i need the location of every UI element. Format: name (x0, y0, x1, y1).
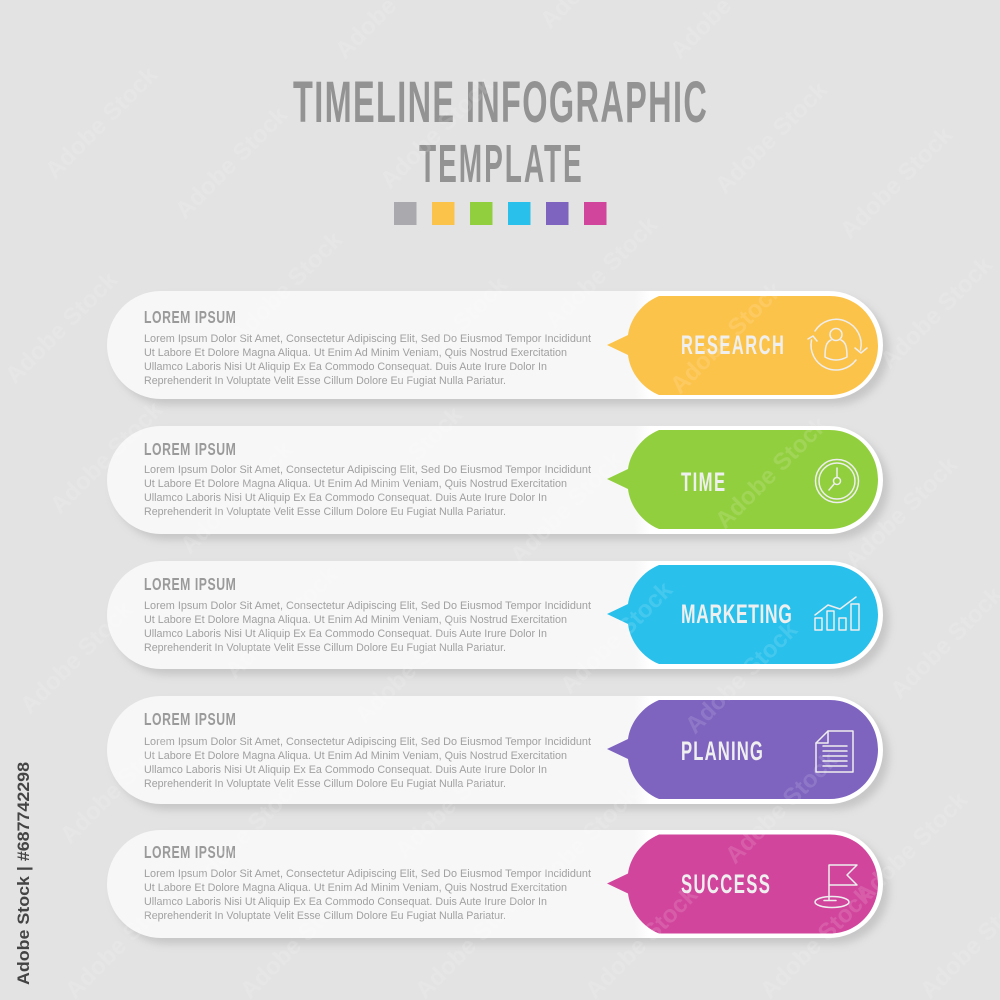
time text block: Ut Labore Et Dolore Magna Aliqua. Ut Enim Ad Minim Veniam, Quis Nostrud Exercitation (144, 478, 567, 490)
marketing text block: Lorem Ipsum Dolor Sit Amet, Consectetur Adipiscing Elit, Sed Do Eiusmod Tempor Incididunt (144, 600, 591, 612)
icon: document (816, 731, 853, 772)
planing text block: Reprehenderit In Voluptate Velit Esse Cillum Dolore Eu Fugiat Nulla Pariatur. (144, 778, 506, 790)
watermark pattern: Adobe Stock (665, 276, 788, 399)
watermark pattern: Adobe Stock (45, 396, 168, 519)
research label: RESEARCH (681, 330, 784, 360)
icon: person with cycle arrows (808, 319, 867, 370)
title: TIMELINE INFOGRAPHIC (293, 69, 707, 134)
marketing text block: Reprehenderit In Voluptate Velit Esse Cillum Dolore Eu Fugiat Nulla Pariatur. (144, 642, 506, 654)
research colored tab (607, 296, 878, 395)
watermark pattern: Adobe Stock (555, 576, 678, 699)
success colored tab (607, 834, 878, 934)
marketing text block (144, 575, 591, 654)
planing text block (144, 710, 591, 790)
time label: TIME (681, 467, 725, 497)
watermark pattern: Adobe Stock (875, 251, 998, 374)
watermark pattern: Adobe Stock (850, 786, 973, 909)
success text block: Ullamco Laboris Nisi Ut Aliquip Ex Ea Commodo Consequat. Duis Aute Irure Dolor In (144, 896, 547, 908)
research text block: Ullamco Laboris Nisi Ut Aliquip Ex Ea Commodo Consequat. Duis Aute Irure Dolor In (144, 361, 547, 373)
watermark pattern: Adobe Stock (390, 271, 513, 394)
research text block: Ut Labore Et Dolore Magna Aliqua. Ut Enim Ad Minim Veniam, Quis Nostrud Exercitation (144, 347, 567, 359)
watermark pattern: Adobe Stock (390, 741, 513, 864)
success text block: LOREM IPSUM (144, 843, 236, 863)
watermark pattern: Adobe Stock (375, 71, 498, 194)
title (293, 69, 707, 195)
planing colored tab (607, 700, 878, 799)
time text block: Reprehenderit In Voluptate Velit Esse Cillum Dolore Eu Fugiat Nulla Pariatur. (144, 506, 506, 518)
watermark pattern: Adobe Stock (40, 61, 163, 184)
research text block (144, 308, 591, 387)
marketing text block: Ullamco Laboris Nisi Ut Aliquip Ex Ea Commodo Consequat. Duis Aute Irure Dolor In (144, 628, 547, 640)
watermark pattern: Adobe Stock (225, 226, 348, 349)
watermark pattern: Adobe Stock (505, 446, 628, 569)
success label: SUCCESS (681, 869, 770, 899)
watermark pattern: Adobe Stock (0, 266, 123, 389)
icon: flag on hole (815, 865, 857, 908)
research text block: LOREM IPSUM (144, 308, 236, 328)
icon: growth chart (815, 597, 859, 630)
marketing text block: Ut Labore Et Dolore Magna Aliqua. Ut Enim Ad Minim Veniam, Quis Nostrud Exercitation (144, 614, 567, 626)
planing text block: Ut Labore Et Dolore Magna Aliqua. Ut Enim Ad Minim Veniam, Quis Nostrud Exercitation (144, 750, 567, 762)
time text block (144, 440, 591, 518)
watermark pattern: Adobe Stock (720, 746, 843, 869)
time text block: LOREM IPSUM (144, 440, 236, 460)
watermark pattern: Adobe Stock (840, 451, 963, 574)
success text block: Ut Labore Et Dolore Magna Aliqua. Ut Enim Ad Minim Veniam, Quis Nostrud Exercitation (144, 882, 567, 894)
planing text block: Ullamco Laboris Nisi Ut Aliquip Ex Ea Commodo Consequat. Duis Aute Irure Dolor In (144, 764, 547, 776)
success text block: Reprehenderit In Voluptate Velit Esse Cillum Dolore Eu Fugiat Nulla Pariatur. (144, 910, 506, 922)
marketing text block: LOREM IPSUM (144, 575, 236, 595)
marketing label: MARKETING (681, 599, 792, 629)
planing text block: Lorem Ipsum Dolor Sit Amet, Consectetur Adipiscing Elit, Sed Do Eiusmod Tempor Incididunt (144, 736, 591, 748)
watermark pattern: Adobe Stock (680, 616, 803, 739)
research text block: Lorem Ipsum Dolor Sit Amet, Consectetur Adipiscing Elit, Sed Do Eiusmod Tempor Incididunt (144, 333, 591, 345)
panel: time (107, 426, 889, 540)
watermark pattern: Adobe Stock (540, 211, 663, 334)
colour legend squares (394, 202, 606, 225)
watermark pattern: Adobe Stock (220, 561, 343, 684)
watermark pattern: Adobe Stock (185, 771, 308, 894)
watermark pattern: Adobe Stock (55, 726, 178, 849)
panel: research (107, 291, 889, 405)
icon: clock (816, 460, 858, 502)
marketing colored tab (607, 565, 878, 664)
time text block: Ullamco Laboris Nisi Ut Aliquip Ex Ea Commodo Consequat. Duis Aute Irure Dolor In (144, 492, 547, 504)
success text block: Lorem Ipsum Dolor Sit Amet, Consectetur Adipiscing Elit, Sed Do Eiusmod Tempor Incididunt (144, 868, 591, 880)
watermark pattern: Adobe Stock (15, 596, 138, 719)
time text block: Lorem Ipsum Dolor Sit Amet, Consectetur Adipiscing Elit, Sed Do Eiusmod Tempor Incididunt (144, 464, 591, 476)
time colored tab (607, 430, 878, 529)
panel: planing (107, 696, 889, 810)
watermark pattern: Adobe Stock (520, 781, 643, 904)
watermark pattern: Adobe Stock (710, 411, 833, 534)
watermark pattern: Adobe Stock (175, 436, 298, 559)
watermark pattern: Adobe Stock (170, 101, 293, 224)
stock id side text: Adobe Stock | #687742298 (14, 762, 33, 985)
success text block (144, 843, 591, 922)
watermark pattern: Adobe Stock (345, 401, 468, 524)
watermark pattern: Adobe Stock (835, 121, 958, 244)
research text block: Reprehenderit In Voluptate Velit Esse Cillum Dolore Eu Fugiat Nulla Pariatur. (144, 375, 506, 387)
title: TEMPLATE (419, 134, 582, 195)
planing text block: LOREM IPSUM (144, 710, 236, 730)
watermark pattern: Adobe Stock (350, 606, 473, 729)
watermark pattern: Adobe Stock (710, 76, 833, 199)
panel: success (107, 830, 889, 944)
planing label: PLANING (681, 736, 763, 766)
panel: marketing (107, 561, 889, 675)
